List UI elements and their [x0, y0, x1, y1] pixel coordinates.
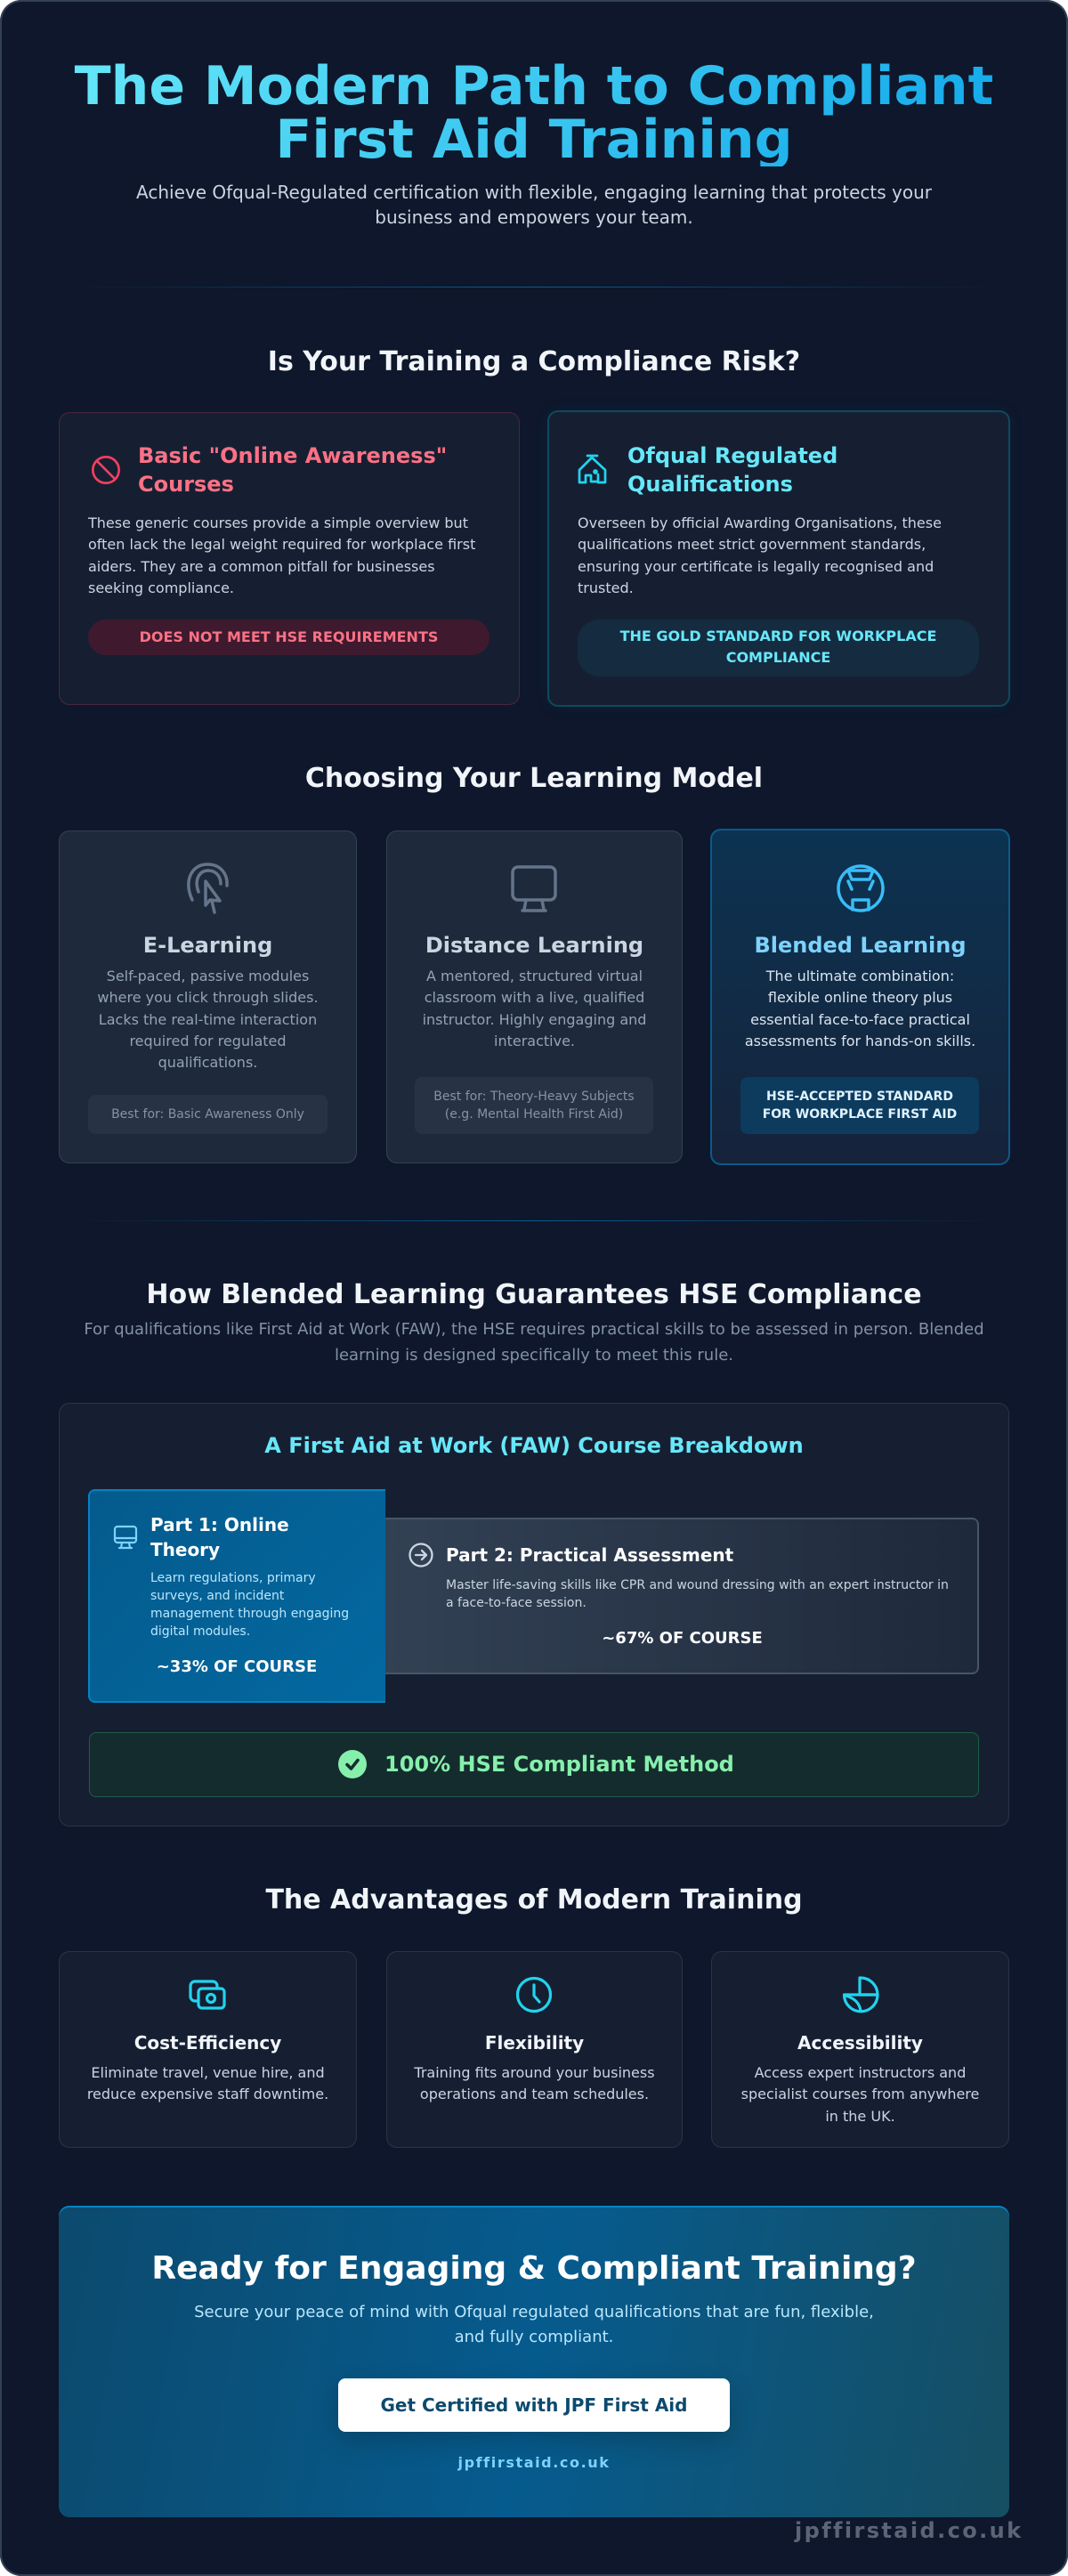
text: e-learning description: required for regulated: [129, 1033, 287, 1049]
text: part 1 description: Learn regulations, primary: [150, 1571, 316, 1585]
heading: HSE compliance: How Blended Learning Guarantees HSE Compliance: [146, 1279, 922, 1310]
text: part 1 description: digital modules.: [150, 1624, 250, 1639]
text: cost-efficiency description: [87, 2064, 328, 2102]
text: e-learning description: Lacks the real-time interaction: [99, 1011, 317, 1028]
text: accessibility description: Access expert instructors and: [755, 2064, 966, 2081]
heading: basic courses: Basic "Online Awareness": [138, 443, 447, 468]
watermark: jpffirstaid.co.uk: [795, 2518, 1024, 2543]
text: part 2 description: Master life-saving skills like CPR and wound dressing with an expert instructor in: [446, 1578, 949, 1592]
text: HSE explanation: [84, 1320, 984, 1365]
icon: house: [578, 454, 607, 484]
heading: ofqual qualifications: [627, 443, 837, 497]
text: compliant method: 100% HSE Compliant Method: [384, 1752, 734, 1777]
text: accessibility description: specialist courses from anywhere: [741, 2086, 979, 2102]
panel: accessibility: [711, 1951, 1009, 2148]
text: blended learning description: essential face-to-face practical: [750, 1011, 970, 1028]
tag: HSE-accepted standard: [740, 1077, 979, 1134]
badge: does not meet HSE: [88, 620, 490, 655]
text: e-learning description: where you click through slides.: [97, 989, 319, 1006]
panel: blended learning: [710, 829, 1010, 1165]
button: get certified: [338, 2378, 730, 2432]
panel: ofqual regulated qualifications: [547, 410, 1010, 707]
icon: cursor rays: [187, 863, 229, 914]
text: accessibility description: in the UK.: [825, 2108, 895, 2125]
heading: part 2: Part 2: Practical Assessment: [446, 1544, 733, 1566]
heading: distance learning: Distance Learning: [425, 933, 643, 958]
title: The Modern Path to Compliant: [75, 55, 993, 117]
text: part 2 description: a face-to-face session.: [446, 1596, 587, 1610]
text: blended learning description: flexible online theory plus: [768, 989, 952, 1006]
link: website: jpffirstaid.co.uk: [457, 2454, 611, 2471]
text: flexibility description: [414, 2064, 655, 2102]
icon: check: [338, 1750, 367, 1778]
text: cost-efficiency description: reduce expensive staff downtime.: [87, 2086, 328, 2102]
text: HSE explanation: For qualifications like First Aid at Work (FAW), the HSE requires practical skills to be assessed in person. Blended: [84, 1320, 984, 1339]
text: part 1 description: [150, 1571, 349, 1639]
text: flexibility description: Training fits around your business: [414, 2064, 655, 2081]
heading: basic courses: [138, 443, 447, 497]
heading: ofqual qualifications: Qualifications: [627, 472, 793, 497]
text: basic courses description: [87, 514, 475, 596]
subtitle: business and empowers your team.: [375, 207, 693, 228]
icon: monitor: [511, 865, 557, 912]
heading: flexibility: Flexibility: [485, 2032, 584, 2054]
panel: call to action: [59, 2206, 1009, 2517]
panel: cost-efficiency: [59, 1951, 357, 2148]
heading: part 1: Part 1: Online: [150, 1514, 289, 1535]
text: basic courses description: often lack the legal weight required for workplace first: [88, 536, 475, 553]
heading: cost-efficiency: Cost-Efficiency: [134, 2032, 281, 2054]
text: basic courses description: aiders. They are a common pitfall for businesses: [88, 558, 435, 575]
icon: desktop: [114, 1526, 137, 1549]
heading: accessibility: Accessibility: [797, 2032, 923, 2054]
panel: e-learning: [59, 830, 357, 1163]
button: get certified: Get Certified with JPF First Aid: [381, 2394, 687, 2416]
text: e-learning description: Self-paced, passive modules: [107, 968, 309, 984]
icon: clock: [516, 1976, 552, 2013]
subtitle: Achieve Ofqual-Regulated certification with flexible, engaging learning that protects your: [136, 182, 932, 203]
text: blended learning description: assessments for hands-on skills.: [745, 1033, 975, 1049]
heading: course breakdown: A First Aid at Work (FAW) Course Breakdown: [264, 1433, 804, 1458]
badge: gold standard: COMPLIANCE: [726, 649, 830, 666]
text: distance learning description: interactive.: [494, 1033, 575, 1049]
badge: gold standard: THE GOLD STANDARD FOR WORKPLACE: [620, 628, 936, 644]
text: ofqual description: qualifications meet strict government standards,: [578, 536, 926, 553]
text: call to action description: [194, 2303, 874, 2346]
badge: gold standard: [578, 620, 979, 676]
panel: basic online awareness courses: [59, 412, 520, 705]
callout: HSE compliant method: [89, 1732, 979, 1797]
text: distance learning description: instructor. Highly engaging and: [423, 1011, 646, 1028]
part 2: practical assessment: [385, 1518, 979, 1674]
heading: learning model: Choosing Your Learning Model: [305, 763, 763, 794]
text: part 1 description: management through engaging: [150, 1607, 349, 1621]
heading: advantages: The Advantages of Modern Training: [265, 1884, 803, 1916]
panel: flexibility: [386, 1951, 683, 2148]
text: flexibility description: operations and team schedules.: [420, 2086, 649, 2102]
text: HSE explanation: learning is designed specifically to meet this rule.: [335, 1346, 733, 1365]
icon: arrow circle: [409, 1543, 433, 1567]
tag: best for theory-heavy subjects: Best for: Theory-Heavy Subjects: [433, 1090, 635, 1104]
text: ofqual description: trusted.: [578, 579, 634, 596]
part 1: online theory: [88, 1489, 385, 1703]
icon: blended learning: [837, 864, 885, 912]
text: blended learning description: The ultimate combination:: [766, 968, 954, 984]
text: call to action description: Secure your peace of mind with Ofqual regulated qualifications that are fun, flexible,: [194, 2303, 874, 2321]
heading: call to action: Ready for Engaging & Compliant Training?: [151, 2250, 917, 2287]
heading: basic courses: Courses: [138, 472, 234, 497]
tag: HSE-accepted standard: HSE-ACCEPTED STANDARD: [766, 1090, 953, 1104]
text: e-learning description: [97, 968, 319, 1071]
icon: prohibited: [92, 456, 120, 484]
text: part 1 description: surveys, and incident: [150, 1589, 284, 1603]
badge: does not meet HSE: DOES NOT MEET HSE REQUIREMENTS: [140, 628, 438, 645]
title: First Aid Training: [275, 109, 793, 171]
tag: best for theory-heavy subjects: (e.g. Mental Health First Aid): [445, 1107, 623, 1122]
text: distance learning description: [423, 968, 646, 1049]
text: accessibility description: [741, 2064, 979, 2125]
text: call to action description: and fully compliant.: [455, 2328, 613, 2346]
text: part 2 description: [446, 1578, 949, 1610]
heading: e-learning: E-Learning: [143, 933, 272, 958]
tag: best for basic awareness: Best for: Basic Awareness Only: [111, 1107, 304, 1122]
text: ofqual description: Overseen by official Awarding Organisations, these: [578, 514, 942, 531]
stat: 33 percent: ~33% OF COURSE: [157, 1657, 317, 1676]
icon: globe segments: [842, 1976, 879, 2013]
text: cost-efficiency description: Eliminate travel, venue hire, and: [91, 2064, 325, 2081]
text: blended learning description: [745, 968, 975, 1049]
heading: ofqual qualifications: Ofqual Regulated: [627, 443, 837, 468]
heading: part 1: Theory: [150, 1539, 220, 1560]
text: basic courses description: seeking compliance.: [88, 579, 234, 596]
tag: HSE-accepted standard: FOR WORKPLACE FIRST AID: [763, 1107, 957, 1122]
stat: 67 percent: ~67% OF COURSE: [602, 1629, 763, 1648]
title: [59, 60, 1009, 166]
subtitle: [136, 182, 932, 228]
text: ofqual description: ensuring your certificate is legally recognised and: [578, 558, 934, 575]
panel: distance learning: [386, 830, 683, 1163]
text: distance learning description: A mentored, structured virtual: [426, 968, 643, 984]
panel: FAW course breakdown: [59, 1403, 1009, 1827]
text: ofqual description: [578, 514, 942, 596]
heading: compliance risk: Is Your Training a Compliance Risk?: [268, 346, 800, 377]
heading: blended learning: Blended Learning: [754, 933, 967, 958]
text: e-learning description: qualifications.: [158, 1054, 257, 1071]
text: basic courses description: These generic courses provide a simple overview but: [88, 514, 468, 531]
tag: best for basic awareness: [88, 1095, 328, 1134]
tag: best for theory-heavy subjects: [415, 1077, 653, 1134]
text: distance learning description: classroom with a live, qualified: [425, 989, 644, 1006]
heading: part 1: [150, 1514, 289, 1560]
icon: banknotes: [189, 1980, 226, 2010]
